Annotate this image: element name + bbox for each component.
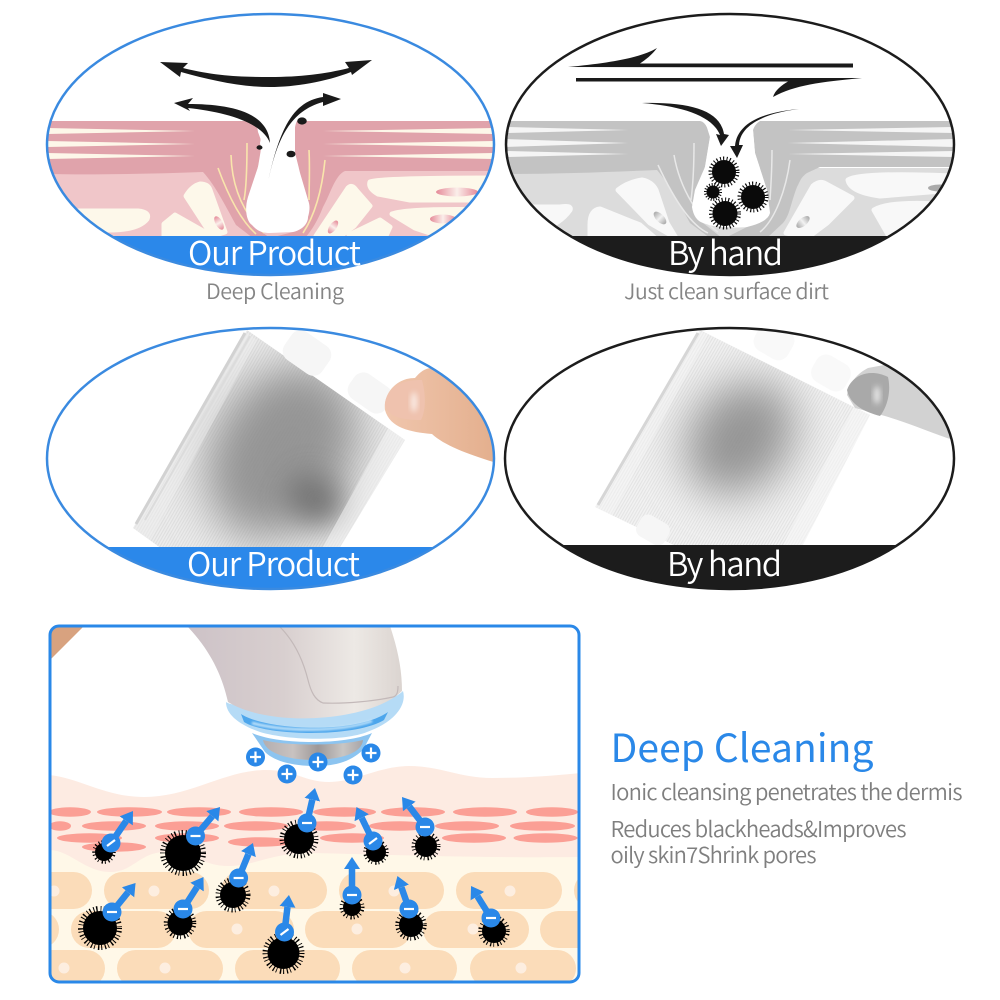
- panel: Our Product cotton pad: [46, 326, 496, 590]
- panel: ionic cleansing illustration: [48, 624, 580, 984]
- dirt particles: [706, 158, 766, 228]
- positive ions: [246, 744, 380, 784]
- label: By hand: By hand: [667, 538, 782, 586]
- panel: Our Product pore diagram: [47, 14, 495, 306]
- label: By hand: By hand: [668, 227, 783, 275]
- arrows: surface sweep and pressing in: [568, 48, 862, 158]
- label band: By hand: [572, 236, 888, 274]
- arrows: pores opening: [160, 60, 372, 182]
- text: benefits line 2: oily skin7Shrink pores: [610, 838, 816, 870]
- panel: By hand pore diagram: [506, 14, 954, 306]
- text: benefits line 1: Reduces blackheads&Improves: [610, 812, 906, 844]
- panel outline: [505, 328, 954, 589]
- skin cross-section, greyscale with dirt: [506, 115, 954, 238]
- panel: By hand cotton pad: [505, 318, 960, 600]
- label: Our Product: Our Product: [187, 538, 360, 586]
- skin cross-section, deep cleaned pore: [47, 115, 495, 238]
- panel outline: [47, 14, 494, 275]
- cleansing device: [187, 626, 404, 766]
- hand corner: [52, 628, 82, 658]
- panel border: [50, 626, 579, 982]
- label band: Our Product: [114, 236, 428, 274]
- label band: Our Product: [108, 547, 432, 588]
- caption: Just clean surface dirt: Just clean surface dirt: [624, 275, 829, 306]
- label band: By hand: [564, 545, 896, 588]
- heading: Deep Cleaning: Deep Cleaning: [610, 718, 874, 774]
- text: ionic cleansing line: Ionic cleansing penetrates the dermis: [610, 775, 962, 807]
- caption: Deep Cleaning: Deep Cleaning: [206, 275, 344, 306]
- less dirty cotton pad photo with grey finger: [595, 330, 950, 545]
- skin layers and device: [52, 628, 578, 980]
- panel outline: [47, 328, 494, 589]
- label: Our Product: Our Product: [188, 227, 361, 275]
- blackheads drawn out by negative ions: [81, 800, 508, 971]
- panel outline: [506, 14, 954, 275]
- dirty cotton pad photo with finger: [133, 330, 493, 547]
